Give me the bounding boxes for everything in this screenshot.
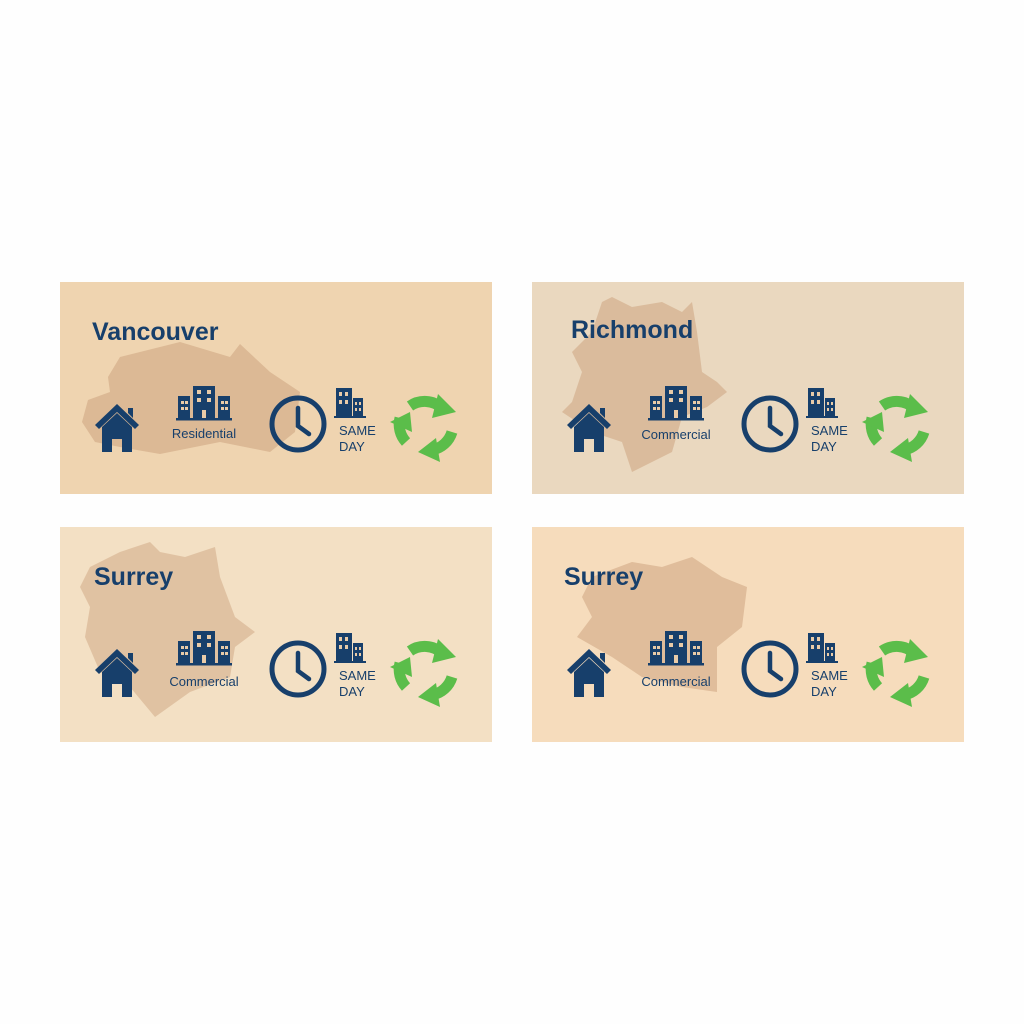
panel: Vancouver xyxy=(60,282,492,494)
title: Surrey xyxy=(564,563,643,591)
map: Richmond xyxy=(562,297,727,472)
icons xyxy=(567,386,928,462)
icons xyxy=(567,631,928,707)
panel: Richmond xyxy=(532,282,964,494)
icons: Commercial xyxy=(641,674,711,689)
icons: Commercial xyxy=(641,427,711,442)
icons: Commercial xyxy=(169,674,239,689)
panel: Surrey right xyxy=(532,527,964,742)
panel: Surrey left xyxy=(60,527,492,742)
title: Surrey xyxy=(94,563,173,591)
title: Richmond xyxy=(571,316,693,344)
map: Vancouver xyxy=(82,342,300,454)
map: Surrey xyxy=(577,557,747,692)
icons xyxy=(95,631,456,707)
title: Vancouver xyxy=(92,318,219,346)
icons: Residential xyxy=(172,426,236,441)
icons xyxy=(95,386,456,462)
map: Surrey xyxy=(80,542,255,717)
